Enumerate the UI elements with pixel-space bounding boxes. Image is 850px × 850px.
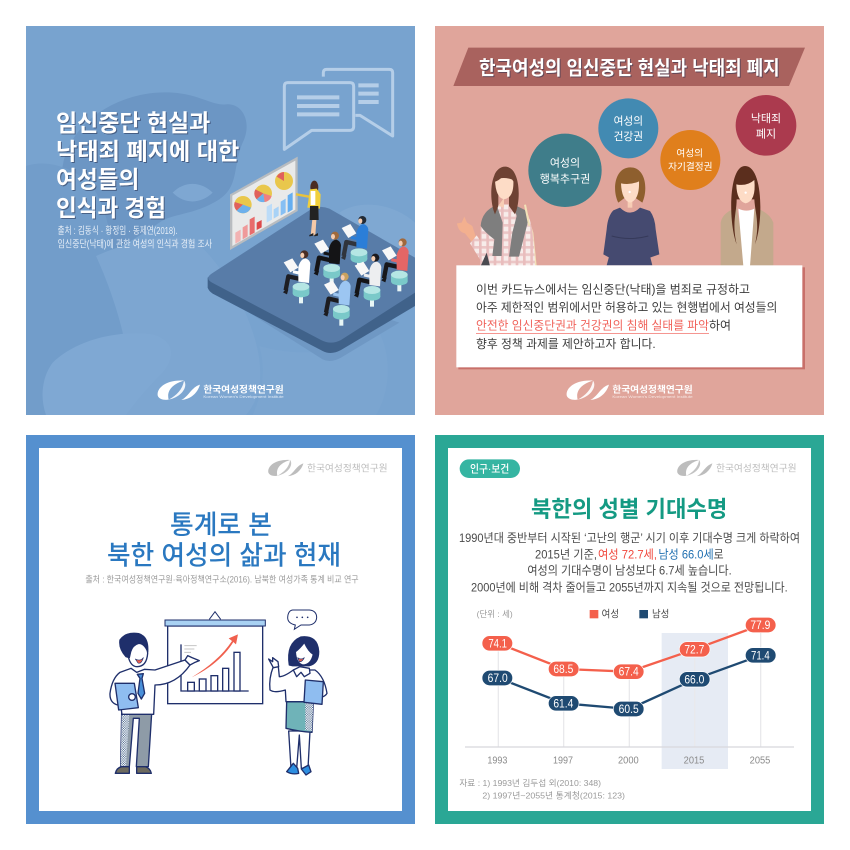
description: 남성 66.0세 [658,547,714,561]
logo [677,460,797,476]
circle: decriminalization: 낙태죄 [751,112,781,125]
line chart: 67.4 [619,666,639,679]
logo [567,381,693,400]
woman center [603,167,659,265]
presenter [296,181,321,236]
title banner [453,48,805,86]
circle: health [598,98,658,158]
line chart: 60.5 [619,703,639,716]
unit label: (단위 : 세) [477,609,513,619]
description: 여성의 기대수명이 남성보다 6.7세 높습니다. [527,564,732,578]
line chart: 66.0 [684,674,705,687]
line chart [465,617,794,769]
circle: happiness: 행복추구권 [540,173,590,186]
title: 통계로 본 [170,510,272,540]
title [107,510,341,570]
line chart: 2015 [684,756,705,767]
line chart: 67.0 [488,672,508,685]
panel: cover card [26,26,415,415]
circle: health: 건강권 [614,131,643,143]
logo [268,460,388,476]
legend: 남성 [652,609,669,621]
title: 북한의 성별 기대수명 [531,496,727,522]
source text: 임신중단(낙태)에 관한 여성의 인식과 경험 조사 [58,238,212,251]
logo: 한국여성정책연구원 [716,463,797,475]
title: 여성들의 [56,167,139,193]
text box: 안전한 임신중단권과 건강권의 침해 실태를 파악 [476,319,709,333]
circle: self determination [660,130,720,190]
icon: speech bubbles [284,69,393,149]
footnote [459,777,625,800]
text box: 아주 제한적인 범위에서만 허용하고 있는 현행법에서 여성들의 [476,300,777,315]
man presenter [110,633,199,773]
line chart: 2000 [618,756,639,767]
background photo silhouette [62,92,246,249]
description: 여성 72.7세, [598,547,657,561]
logo: 한국여성정책연구원 [307,463,388,475]
line chart: 74.1 [488,637,507,650]
panel: intro card [435,26,824,415]
text box: 하여 [709,319,731,333]
line chart: 1997 [553,756,573,767]
category tag: 인구·보건 [470,464,509,476]
circle: decriminalization: 폐지 [756,127,776,140]
panel: life expectancy chart card [435,435,824,824]
logo [158,381,284,400]
circle: self determination: 여성의 [676,148,703,160]
description: 1990년대 중반부터 시작된 ‘고난의 행군’ 시기 이후 기대수명 크게 하락하여 [459,530,800,545]
logo: Korean Women's Development Institute [612,395,693,399]
line chart: 72.7 [684,643,704,656]
description: 로 [714,547,724,561]
legend [590,609,669,621]
circle: decriminalization [736,95,796,156]
title banner: 한국여성의 임신중단 현실과 낙태죄 폐지 [479,58,780,80]
description: 2015년 기준, [535,547,597,561]
legend: 여성 [602,609,619,621]
text box: 향후 정책 과제를 제안하고자 합니다. [476,336,656,351]
circle: health: 여성의 [614,115,643,128]
woman left [457,167,537,266]
text box [456,265,805,369]
line chart: 61.4 [553,697,574,710]
circle: happiness: 여성의 [550,157,580,170]
title: 낙태죄 폐지에 대한 [56,138,239,164]
source text: 출처 : 김동식 · 황정임 · 동제연(2018). [58,224,178,237]
title: 북한 여성의 삶과 현재 [107,540,341,570]
line chart: 1993 [487,756,508,767]
speech bubble [288,610,317,629]
line chart: 68.5 [553,663,573,676]
description: 2000년에 비해 격차 줄어들고 2055년까지 지속될 것으로 전망됩니다. [471,580,788,594]
line chart: 71.4 [751,649,770,662]
logo: 한국여성정책연구원 [203,384,284,395]
footnote: 자료 : 1) 1993년 김두섭 외(2010: 348) [459,777,601,788]
logo: 한국여성정책연구원 [612,384,693,395]
footnote: 2) 1997년~2055년 통계청(2015: 123) [482,789,625,800]
line chart: 77.9 [750,619,770,632]
source text [58,224,212,251]
presentation board [165,612,265,704]
platform [208,207,415,361]
title: 임신중단 현실과 [56,110,210,136]
source: 출처 : 한국여성정책연구원·육아정책연구소(2016). 남북한 여성가족 통계 비교 연구 [85,573,359,584]
line chart: 2055 [750,756,771,767]
circle: happiness [528,134,602,207]
woman presenter [269,637,327,775]
panel: statistics title card [26,435,415,824]
title: 인식과 경험 [56,195,166,221]
circle: self determination: 자기결정권 [668,161,713,173]
woman right [721,166,773,266]
category tag [460,459,520,478]
description [459,530,800,594]
presentation screen [230,157,298,250]
text box: 이번 카드뉴스에서는 임신중단(낙태)을 범죄로 규정하고 [476,282,750,296]
logo: Korean Women's Development Institute [203,395,284,399]
audience [283,216,409,326]
title [56,110,239,221]
